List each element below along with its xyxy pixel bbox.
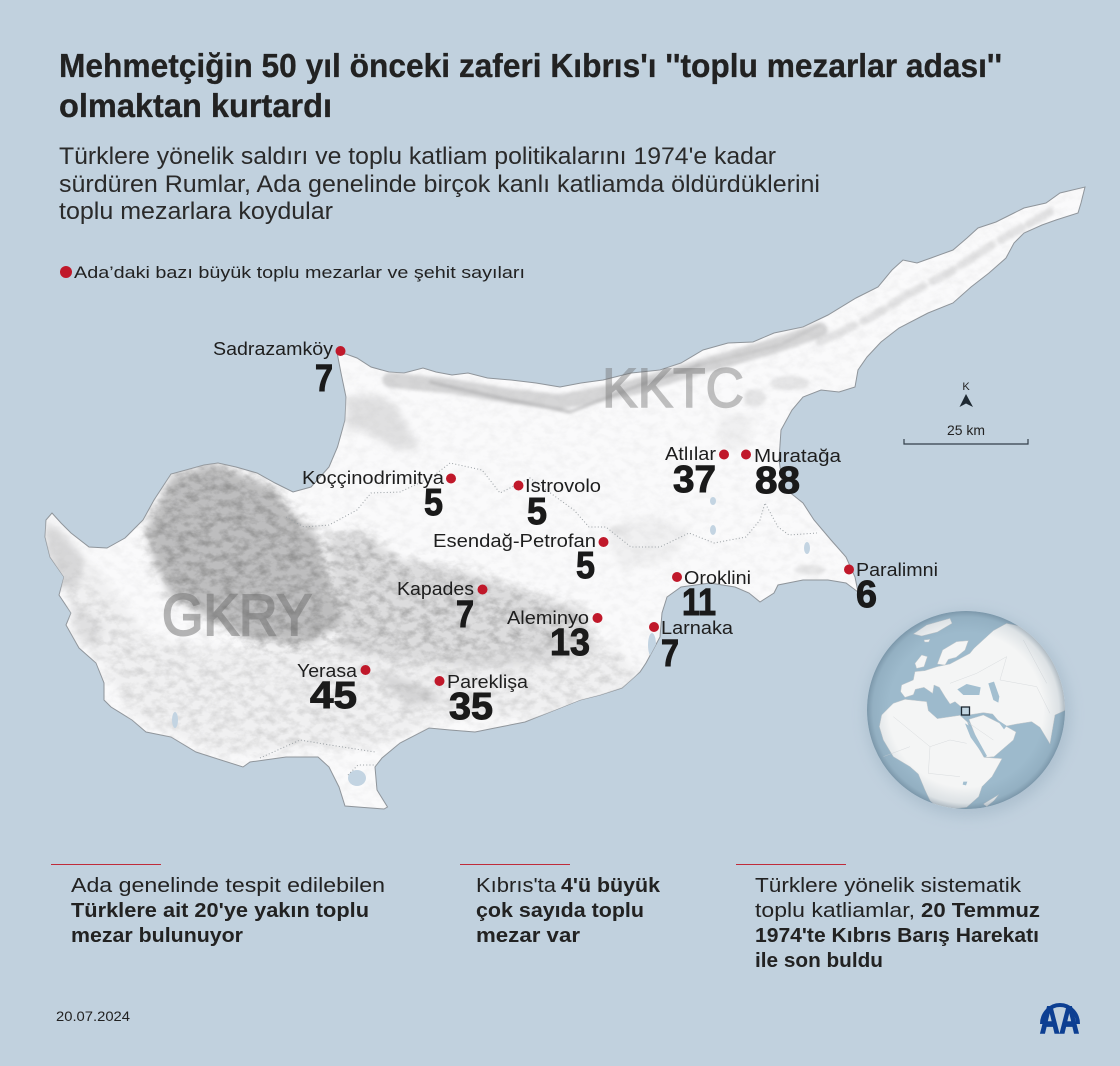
north arrow: K [962,381,970,393]
marker: Istrovolo [514,476,601,533]
marker: Pareklişa: 35 [449,686,493,728]
marker: Oroklini: 11 [682,582,716,624]
note: end of massacres: 20 Temmuz [921,900,1040,922]
note: end of massacres: ile son buldu [755,950,883,972]
marker: Larnaka [649,618,734,675]
marker: Oroklini: Oroklini [684,568,751,588]
marker: Oroklini [672,568,751,624]
subtitle: toplu mezarlara koydular [59,198,333,225]
note: mass grave count: mezar bulunuyor [71,925,243,947]
note: end of massacres: Türklere yönelik sistematik [755,875,1022,897]
marker: Istrovolo: 5 [527,491,547,533]
marker: Yerasa: 45 [310,675,357,717]
note: large mass graves [460,864,661,947]
marker: Larnaka: 7 [661,633,679,675]
note: end of massacres [736,864,1040,972]
marker: Sadrazamköy: Sadrazamköy [213,339,333,359]
note: large mass graves: 4'ü büyük [561,875,661,897]
marker: Yerasa: Yerasa [297,661,358,681]
marker: Aleminyo [507,608,602,664]
island land [45,187,1085,809]
marker: Pareklişa: Pareklişa [447,672,529,692]
marker: Atlılar [665,444,729,501]
marker: Sadrazamköy: 7 [315,358,333,400]
marker: Paralimni [844,560,938,616]
note: mass grave count: Ada genelinde tespit edilebilen [71,875,385,897]
legend: Ada’daki bazı büyük toplu mezarlar ve şehit sayıları [74,263,525,282]
marker: Esendağ-Petrofan [433,531,608,587]
note: large mass graves: mezar var [476,925,580,947]
marker: Aleminyo: Aleminyo [507,608,589,628]
title: olmaktan kurtardı [59,87,332,124]
marker: Paralimni: 6 [856,574,877,616]
marker: Paralimni: Paralimni [856,560,938,580]
subtitle [59,143,820,225]
marker: Sadrazamköy [213,339,346,400]
marker: Koççinodrimitya: 5 [424,482,443,524]
locator globe [866,611,1070,816]
scale bar: 25 km [947,422,985,438]
marker: Esendağ-Petrofan: 5 [576,545,595,587]
map of Cyprus [40,180,1100,820]
marker: Kapades [397,579,488,636]
region label: GKRY: GKRY [162,583,312,648]
note: large mass graves: Kıbrıs'ta [476,875,557,897]
marker: Aleminyo: 13 [550,622,590,664]
north arrow [960,381,973,407]
marker: Muratağa: Muratağa [754,446,842,466]
note: mass grave count: Türklere ait 20'ye yakın toplu [71,900,369,922]
marker: Koççinodrimitya [302,468,456,524]
marker: Pareklişa [434,672,529,728]
locator square [962,707,970,715]
marker: Muratağa: 88 [755,460,800,502]
terrain shading [40,180,1100,820]
marker: Kapades: Kapades [397,579,474,599]
note: mass grave count [51,864,385,947]
subtitle: sürdüren Rumlar, Ada genelinde birçok kanlı katliamda öldürdüklerini [59,171,820,198]
marker: Koççinodrimitya: Koççinodrimitya [302,468,445,488]
note: large mass graves: çok sayıda toplu [476,900,644,922]
logo: Anadolu Agency: AA [1040,1000,1079,1042]
marker: Larnaka: Larnaka [661,618,734,638]
marker: Atlılar: 37 [673,459,716,501]
marker: Muratağa [741,446,842,502]
marker: Yerasa [297,661,370,717]
date: 20.07.2024 [56,1008,130,1024]
marker: Istrovolo: Istrovolo [525,476,601,496]
note: end of massacres: toplu katliamlar, [755,900,915,922]
title: Mehmetçiğin 50 yıl önceki zaferi Kıbrıs'ı ''toplu mezarlar adası'' [59,47,1002,84]
scale bar [904,422,1028,444]
title [59,47,1002,124]
note: end of massacres: 1974'te Kıbrıs Barış Harekatı [755,925,1039,947]
marker: Esendağ-Petrofan: Esendağ-Petrofan [433,531,596,551]
subtitle: Türklere yönelik saldırı ve toplu katliam politikalarını 1974'e kadar [59,143,776,170]
marker: Atlılar: Atlılar [665,444,716,464]
region label: KKTC: KKTC [602,356,744,419]
marker: Kapades: 7 [456,594,474,636]
